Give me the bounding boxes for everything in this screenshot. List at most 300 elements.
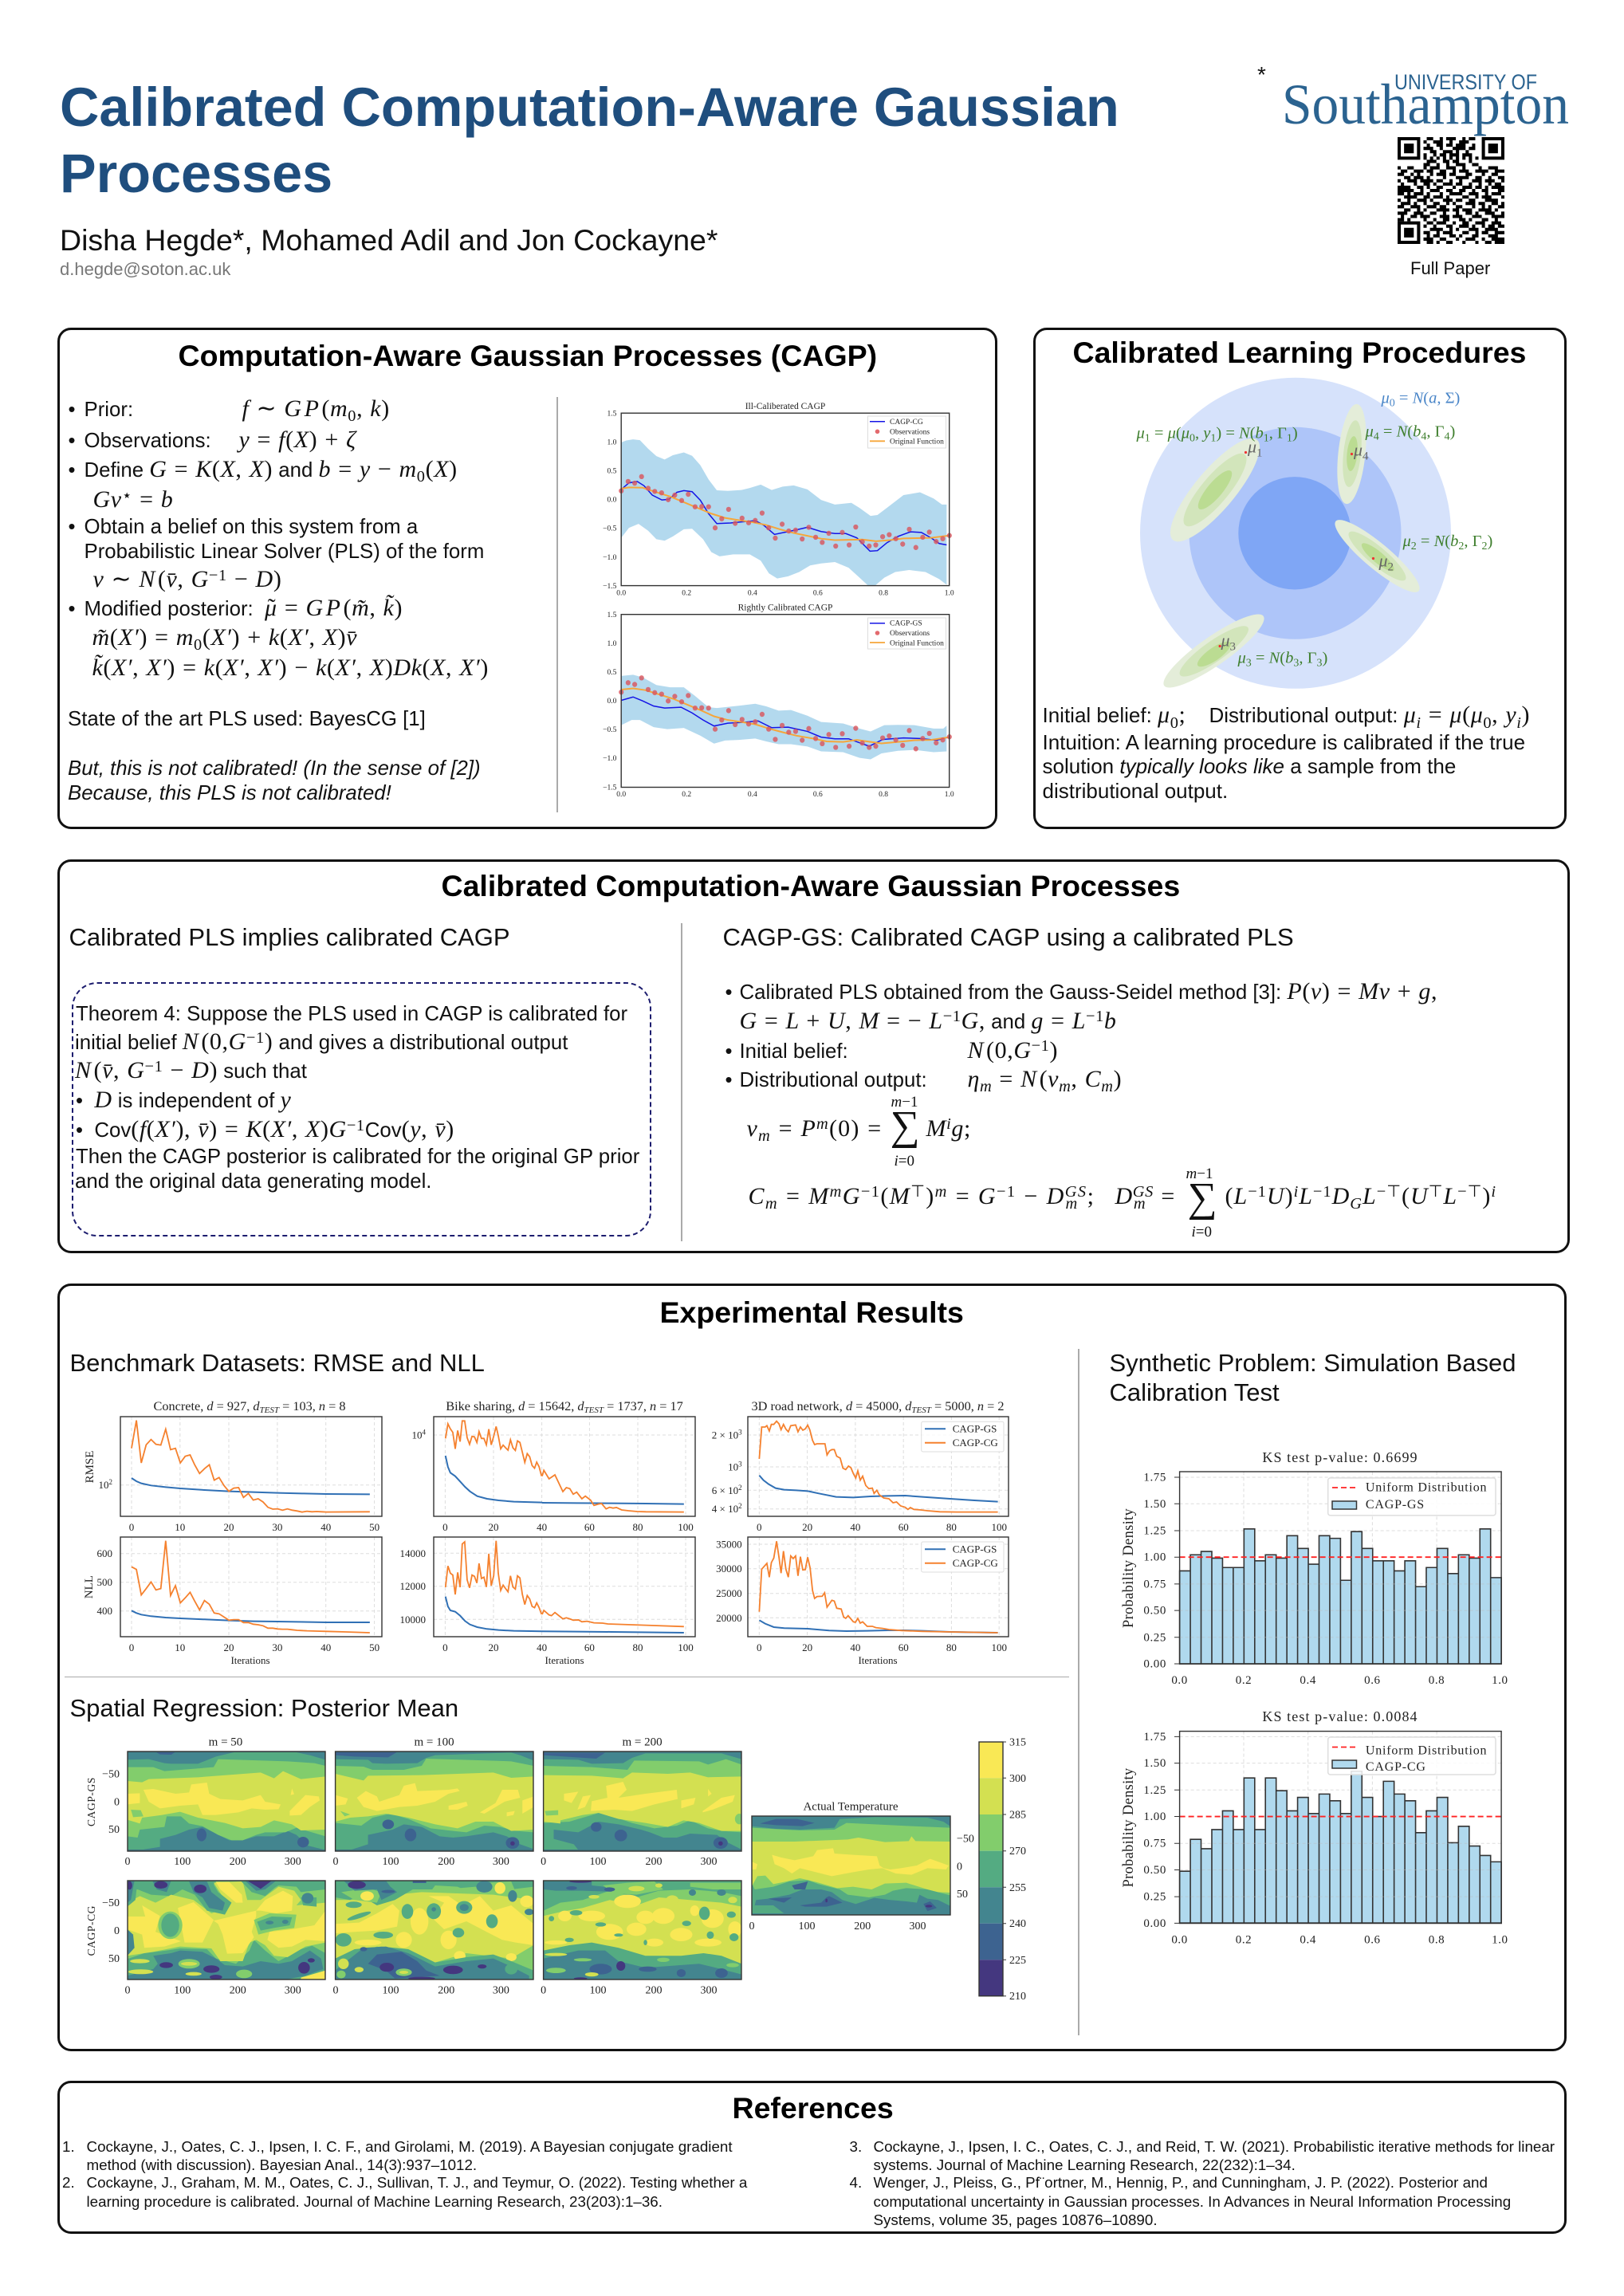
- diagram: prior and distributional outputs: 0: [1390, 397, 1395, 410]
- histogram: CAGP-CG: 0.6: [1364, 1933, 1380, 1946]
- plot: Concrete: 40: [320, 1521, 331, 1532]
- plot: Bike sharing: 10: [411, 1429, 422, 1441]
- plot: 3D road network: CAGP-CG: [952, 1556, 997, 1569]
- map: CAGP-CG m=50: −50: [102, 1897, 120, 1909]
- histogram: CAGP-CG: 1.0: [1492, 1933, 1508, 1946]
- histogram: CAGP-GS: 0.50: [1143, 1604, 1166, 1617]
- callout: Theorem 4: N(v̄, G−1 − D) such that: [75, 1057, 307, 1083]
- diagram: prior and distributional outputs: μ: [1248, 437, 1256, 456]
- map: CAGP-CG m=50: 50: [108, 1953, 120, 1964]
- map: CAGP-CG m=50: 200: [229, 1984, 246, 1996]
- text block: CAGP-GS derivation: G = L + U, M = − L−1G, and g = L−1b: [740, 1008, 1117, 1034]
- plot: Concrete: RMSE: [83, 1450, 96, 1483]
- diagram: prior and distributional outputs: 4: [1444, 431, 1449, 443]
- text block: initial belief and intuition: Distributional output: μi = μ(μ0, yi): [1209, 702, 1530, 732]
- plot: Concrete: 2: [108, 1478, 112, 1486]
- diagram: prior and distributional outputs: , Γ: [1464, 533, 1482, 550]
- diagram: prior and distributional outputs: =: [1417, 533, 1434, 550]
- plot: 3D road network: 20: [802, 1521, 812, 1532]
- plot: Concrete: NLL: [83, 1575, 96, 1598]
- author email: d.hegde@soton.ac.uk: [60, 259, 230, 279]
- diagram: prior and distributional outputs: μ: [1403, 533, 1411, 550]
- map: CAGP-GS m=100: 300: [492, 1856, 509, 1867]
- map: CAGP-GS m=200: [541, 1736, 744, 1867]
- histogram: CAGP-GS: 0.75: [1143, 1578, 1166, 1590]
- plot: rightly calibrated CAGP: −1.5: [603, 784, 616, 792]
- histogram: CAGP-CG: 0.8: [1428, 1933, 1445, 1946]
- plot: ill-calibrated CAGP: 0.4: [747, 589, 757, 597]
- plot: rightly calibrated CAGP: 0.0: [616, 791, 626, 799]
- plot: ill-calibrated CAGP: 0.0: [616, 589, 626, 597]
- diagram: prior and distributional outputs: 3: [1230, 641, 1236, 654]
- text block: CAGP-GS derivation: •: [725, 1040, 733, 1063]
- map: CAGP-CG m=100: 0: [332, 1984, 338, 1996]
- asterisk: *: [1257, 62, 1266, 87]
- plot: Concrete: = 103,: [279, 1398, 318, 1413]
- diagram: prior and distributional outputs: μ: [1137, 424, 1145, 442]
- panel: Experimental Results: [57, 1284, 1567, 2051]
- plot: rightly calibrated CAGP: 0.5: [607, 669, 616, 677]
- text block: CAGP-GS derivation: ∑: [1188, 1175, 1217, 1221]
- colorbar: 285: [1009, 1809, 1025, 1821]
- text block: CAGP definitions: •: [69, 516, 76, 538]
- text block: CAGP definitions: Probabilistic Linear Solver (PLS) of the form: [85, 541, 484, 563]
- callout: Theorem 4: [72, 982, 651, 1236]
- plot: 3D road network: n = 2: [977, 1398, 1004, 1413]
- diagram: prior and distributional outputs: ): [1449, 423, 1455, 440]
- map: actual temperature: 0: [749, 1920, 754, 1932]
- map: actual temperature: 100: [798, 1920, 815, 1932]
- reference list: left column: Cockayne, J., Graham, M. M., Oates, C. J., Sullivan, T. J., and Teymur, O. (2022). Testing whether a: [86, 2174, 747, 2191]
- reference list: left column: 1.: [62, 2138, 75, 2155]
- map: CAGP-GS m=50: m = 50: [208, 1736, 242, 1748]
- plot: 3D road network: 20: [802, 1641, 812, 1653]
- plot: Concrete: 10: [175, 1641, 185, 1653]
- map: CAGP-CG m=50: [85, 1880, 325, 1996]
- plot: Concrete: 30: [272, 1521, 282, 1532]
- colorbar: 255: [1009, 1881, 1025, 1893]
- map: CAGP-GS m=50: [85, 1736, 325, 1867]
- map: actual temperature: 200: [854, 1920, 871, 1932]
- map: CAGP-GS m=200: 200: [645, 1856, 662, 1867]
- subheading: left column: Calibrated PLS implies calibrated CAGP: [69, 923, 510, 951]
- plot: Bike sharing: 80: [632, 1641, 643, 1653]
- plot: 3D road network: Iterations: [858, 1653, 897, 1666]
- callout: Theorem 4: • Cov(f(X′), v̄) = K(X′, X)G−1Cov(y, v̄): [76, 1116, 454, 1142]
- subheading: synthetic problem: Synthetic Problem: Simulation Based: [1110, 1349, 1516, 1377]
- plot: 3D road network: 25000: [716, 1586, 741, 1599]
- colorbar: 210: [1009, 1991, 1025, 2003]
- text block: initial belief and intuition: [1043, 702, 1530, 803]
- plot: ill-calibrated CAGP: −1.5: [603, 582, 616, 590]
- plot: 3D road network: 6 × 10: [711, 1484, 738, 1496]
- diagram: prior and distributional outputs: 1: [1210, 432, 1216, 445]
- colorbar: 240: [1009, 1918, 1025, 1930]
- map: CAGP-GS m=50: 300: [284, 1856, 301, 1867]
- plot: 3D road network: 0: [757, 1521, 761, 1532]
- plot: rightly calibrated CAGP: 0.0: [607, 698, 616, 706]
- map: CAGP-CG m=200: 0: [541, 1984, 546, 1996]
- reference list: right column: Cockayne, J., Ipsen, I. C., Oates, C. J., and Reid, T. W. (2021). Probabilistic iterative methods for linear: [874, 2138, 1555, 2155]
- diagram: prior and distributional outputs: N(b: [1397, 423, 1421, 440]
- logo: University of Southampton: Southampton: [1282, 73, 1569, 136]
- plot: Concrete: 20: [223, 1641, 234, 1653]
- plot: 3D road network: CAGP-GS: [952, 1543, 997, 1555]
- panel: Computation-Aware Gaussian Processes: [57, 328, 997, 829]
- plot: rightly calibrated CAGP: 0.8: [879, 791, 888, 799]
- plot: ill-calibrated CAGP: Original Function: [890, 438, 944, 446]
- reference list: left column: method (with discussion). Bayesian Anal., 14(3):937–1012.: [86, 2156, 477, 2173]
- plot: rightly calibrated CAGP: [603, 603, 954, 799]
- histogram: CAGP-GS: 1.50: [1143, 1497, 1166, 1510]
- diagram: prior and distributional outputs: ): [1322, 649, 1327, 666]
- histogram: CAGP-CG: CAGP-CG: [1365, 1760, 1425, 1773]
- diagram: prior and distributional outputs: [1137, 378, 1492, 689]
- text block: CAGP-GS derivation: •: [725, 981, 733, 1004]
- reference list: left column: 2.: [62, 2174, 75, 2191]
- plot: Concrete: 600: [96, 1547, 112, 1559]
- diagram: prior and distributional outputs: , Γ: [1426, 423, 1445, 440]
- diagram: prior and distributional outputs: 3: [1246, 657, 1252, 670]
- plot: ill-calibrated CAGP: 0.5: [607, 467, 616, 475]
- plot: rightly calibrated CAGP: Observations: [890, 630, 930, 638]
- plot: 3D road network: = 5000,: [930, 1398, 977, 1413]
- histogram: CAGP-CG: KS test p-value: 0.0084: [1262, 1708, 1418, 1724]
- diagram: prior and distributional outputs: =: [1395, 389, 1413, 407]
- heading: Calibrated Computation-Aware Gaussian Processes: [442, 869, 1180, 902]
- map: CAGP-CG m=50: 0: [124, 1984, 130, 1996]
- text block: initial belief and intuition: Intuition: A learning procedure is calibrated if the true: [1043, 730, 1525, 754]
- plot: Bike sharing: 40: [537, 1521, 547, 1532]
- plot: Concrete: TEST: [259, 1405, 279, 1414]
- callout: Theorem 4: initial belief N(0,G−1) and gives a distributional output: [75, 1028, 568, 1055]
- text block: CAGP definitions: But, this is not calibrated! (In the sense of [2]): [68, 757, 481, 780]
- plot: Bike sharing: 60: [584, 1641, 594, 1653]
- plot: Concrete: Concrete, d = 927, d: [153, 1398, 259, 1413]
- text block: CAGP definitions: Modified posterior: μ = GP(m̃, k̃): [85, 595, 403, 621]
- plot: Bike sharing: 20: [488, 1641, 498, 1653]
- text block: CAGP-GS derivation: Initial belief:: [740, 1040, 848, 1063]
- diagram: prior and distributional outputs: 0: [1189, 432, 1195, 445]
- histogram: CAGP-CG: 0.4: [1300, 1933, 1315, 1946]
- plot: ill-calibrated CAGP: 0.8: [879, 589, 888, 597]
- plot: Bike sharing: 0: [442, 1521, 447, 1532]
- reference list: right column: [850, 2138, 1555, 2228]
- text block: CAGP-GS derivation: •: [725, 1069, 733, 1091]
- reference list: right column: systems. Journal of Machine Learning Research, 22(232):1–34.: [874, 2156, 1296, 2173]
- text block: initial belief and intuition: Initial belief: μ0;: [1043, 702, 1186, 732]
- plot: 3D road network: 0: [757, 1641, 761, 1653]
- plot: Bike sharing: 20: [488, 1521, 498, 1532]
- plot: rightly calibrated CAGP: Original Function: [890, 639, 944, 647]
- subheading: benchmark datasets: Benchmark Datasets: RMSE and NLL: [70, 1349, 485, 1377]
- text block: CAGP-GS derivation: [725, 978, 1496, 1240]
- map: CAGP-GS m=50: −50: [102, 1768, 120, 1780]
- plot: Bike sharing: TEST: [584, 1405, 604, 1414]
- plot: Concrete: 400: [96, 1604, 112, 1617]
- map: CAGP-GS m=100: m = 100: [414, 1736, 454, 1748]
- text block: CAGP-GS derivation: vm = Pm(0) =: [746, 1115, 882, 1145]
- plot: Bike sharing: 80: [632, 1521, 643, 1532]
- histogram: CAGP-CG: 0.25: [1143, 1890, 1166, 1903]
- map: CAGP-CG m=100: 300: [492, 1984, 509, 1996]
- text block: CAGP definitions: •: [69, 399, 76, 421]
- map: CAGP-GS m=100: 100: [382, 1856, 399, 1867]
- text block: CAGP definitions: m̃(X′) = m0(X′) + k(X′, X)v̄: [92, 624, 357, 654]
- plot: rightly calibrated CAGP: 1.0: [607, 639, 616, 647]
- plot: ill-calibrated CAGP: −1.0: [603, 553, 616, 561]
- reference list: right column: Systems, volume 35, pages 10876–10890.: [874, 2211, 1158, 2228]
- callout: Theorem 4: Then the CAGP posterior is calibrated for the original GP prior: [76, 1146, 639, 1168]
- map: CAGP-CG m=50: 300: [284, 1984, 301, 1996]
- plot: rightly calibrated CAGP: −0.5: [603, 726, 616, 734]
- colorbar: 225: [1009, 1954, 1025, 1966]
- diagram: prior and distributional outputs: , Γ: [1269, 424, 1287, 442]
- text block: CAGP definitions: Define G = K(X, X) and b = y − m0(X): [85, 456, 458, 486]
- plot: rightly calibrated CAGP: 1.0: [944, 791, 954, 799]
- plot: 3D road network: 60: [898, 1641, 908, 1653]
- authors: Disha Hegde*, Mohamed Adil and Jon Cockayne*: [60, 223, 718, 257]
- reference list: right column: 3.: [850, 2138, 862, 2155]
- text block: CAGP-GS derivation: Cm = MmG−1(M⊤)m = G−1 − DGSm ;: [748, 1183, 1095, 1213]
- reference list: left column: Cockayne, J., Oates, C. J., Ipsen, I. C. F., and Girolami, M. (2019). A Bayesian conjugate gradient: [86, 2138, 733, 2155]
- QR caption: Full Paper: [1410, 258, 1490, 278]
- histogram: CAGP-CG: 1.00: [1143, 1810, 1166, 1822]
- plot: Concrete: 0: [128, 1521, 134, 1532]
- text block: CAGP-GS derivation: Mig;: [926, 1115, 971, 1142]
- diagram: prior and distributional outputs: N(b: [1434, 533, 1458, 550]
- histogram: CAGP-GS: CAGP-GS: [1365, 1497, 1424, 1511]
- plot: Bike sharing: 0: [442, 1641, 447, 1653]
- histogram: CAGP-GS: [1121, 1449, 1508, 1687]
- colorbar: [979, 1736, 1025, 2003]
- colorbar: 270: [1009, 1846, 1025, 1858]
- map: CAGP-CG m=50: 100: [174, 1984, 191, 1996]
- QR code: [1398, 137, 1504, 244]
- plot: rightly calibrated CAGP: CAGP-GS: [890, 619, 922, 627]
- panel: References: [57, 2081, 1567, 2234]
- plot: Concrete: 10: [98, 1478, 108, 1491]
- plot: Bike sharing: 14000: [399, 1547, 426, 1559]
- plot: Concrete: 40: [320, 1641, 331, 1653]
- histogram: CAGP-CG: [1121, 1708, 1508, 1946]
- text block: CAGP definitions: •: [69, 430, 76, 452]
- colorbar: 315: [1009, 1736, 1025, 1748]
- text block: CAGP definitions: State of the art PLS used: BayesCG [1]: [68, 708, 426, 730]
- plot: 3D road network: CAGP-GS: [952, 1422, 997, 1434]
- plot: 3D road network: 100: [991, 1641, 1006, 1653]
- histogram: CAGP-GS: 0.25: [1143, 1631, 1166, 1644]
- plot: Bike sharing: = 1737,: [604, 1398, 650, 1413]
- text block: initial belief and intuition: solution typically looks like a sample from the: [1043, 754, 1456, 778]
- plot: Bike sharing: 12000: [399, 1580, 426, 1591]
- histogram: CAGP-CG: 0.0: [1171, 1933, 1187, 1946]
- diagram: prior and distributional outputs: μ: [1221, 630, 1230, 651]
- map: CAGP-CG m=100: 100: [382, 1984, 399, 1996]
- map: actual temperature: 50: [957, 1888, 968, 1901]
- diagram: prior and distributional outputs: =: [1252, 649, 1269, 666]
- histogram: CAGP-CG: 0.2: [1235, 1933, 1252, 1946]
- plot: rightly calibrated CAGP: Rightly Calibrated CAGP: [737, 603, 832, 612]
- subheading: right column: CAGP-GS: Calibrated CAGP using a calibrated PLS: [722, 923, 1294, 951]
- text block: CAGP-GS derivation: ηm = N(vm, Cm): [968, 1066, 1122, 1095]
- plot: ill-calibrated CAGP: Ill-Caliberated CAGP: [745, 402, 825, 411]
- text block: CAGP definitions: f ∼ GP(m0, k): [242, 395, 390, 425]
- text block: CAGP definitions: Gv⋆ = b: [92, 486, 173, 513]
- histogram: CAGP-CG: 0.50: [1143, 1864, 1166, 1877]
- histogram: CAGP-GS: 1.0: [1492, 1674, 1508, 1687]
- plot: Bike sharing: [399, 1398, 695, 1666]
- histogram: CAGP-CG: 1.50: [1143, 1757, 1166, 1770]
- plot: Concrete: 20: [223, 1521, 234, 1532]
- diagram: prior and distributional outputs: ) =: [1216, 424, 1239, 442]
- heading: Experimental Results: [660, 1295, 964, 1329]
- map: actual temperature: −50: [957, 1833, 973, 1845]
- plot: Bike sharing: 10000: [399, 1614, 426, 1625]
- plot: Concrete: n = 8: [318, 1398, 345, 1413]
- map: CAGP-GS m=200: 100: [589, 1856, 606, 1867]
- plot: Bike sharing: 100: [678, 1641, 693, 1653]
- panel: Calibrated Learning Procedures: [1033, 328, 1567, 829]
- colorbar: 300: [1009, 1772, 1025, 1784]
- map: CAGP-CG m=200: 100: [589, 1984, 606, 1996]
- heading: References: [732, 2091, 894, 2125]
- text block: CAGP definitions: •: [69, 459, 76, 482]
- plot: ill-calibrated CAGP: 1.0: [944, 589, 954, 597]
- diagram: prior and distributional outputs: μ: [1354, 440, 1363, 459]
- plot: Concrete: 500: [96, 1575, 112, 1588]
- plot: Concrete: [83, 1398, 381, 1666]
- text block: CAGP definitions: •: [69, 598, 76, 620]
- chart: spatial regression contour maps: [85, 1736, 1025, 2003]
- plot: 3D road network: 3D road network, d = 45000, d: [751, 1398, 911, 1413]
- plot: ill-calibrated CAGP: CAGP-CG: [890, 418, 922, 426]
- histogram: CAGP-CG: 1.75: [1143, 1730, 1166, 1743]
- plot: rightly calibrated CAGP: 0.4: [747, 791, 757, 799]
- reference list: right column: 4.: [850, 2174, 862, 2191]
- text block: CAGP-GS derivation: i=0: [1191, 1224, 1212, 1240]
- text block: CAGP definitions: Because, this PLS is not calibrated!: [68, 782, 391, 804]
- plot: 3D road network: 2 × 10: [711, 1429, 738, 1441]
- map: CAGP-GS m=100: [332, 1736, 533, 1867]
- text block: CAGP-GS derivation: m−1: [891, 1094, 918, 1111]
- diagram: prior and distributional outputs: y: [1203, 424, 1210, 442]
- diagram: prior and distributional outputs: μ(μ: [1168, 424, 1189, 442]
- plot: ill-calibrated CAGP: −0.5: [603, 525, 616, 533]
- map: CAGP-GS m=200: m = 200: [622, 1736, 662, 1748]
- plot: 3D road network: 100: [991, 1521, 1006, 1532]
- text block: CAGP definitions: v ∼ N(v̄, G−1 − D): [92, 566, 281, 592]
- plot: 3D road network: TEST: [911, 1405, 931, 1414]
- plot: 3D road network: 30000: [716, 1563, 741, 1574]
- plot: ill-calibrated CAGP: 1.0: [607, 438, 616, 446]
- plot: ill-calibrated CAGP: 0.0: [607, 496, 616, 504]
- diagram: prior and distributional outputs: N(a, Σ): [1413, 389, 1460, 407]
- plot: Bike sharing: Bike sharing, d = 15642, d: [446, 1398, 584, 1413]
- map: CAGP-CG m=100: 200: [438, 1984, 454, 1996]
- heading: Computation-Aware Gaussian Processes (CAGP): [179, 339, 877, 372]
- histogram: CAGP-GS: 1.75: [1143, 1471, 1166, 1484]
- plot: Bike sharing: n = 17: [650, 1398, 682, 1413]
- plot: Bike sharing: 100: [678, 1521, 693, 1532]
- plot: 3D road network: 10: [728, 1461, 738, 1472]
- text block: CAGP-GS derivation: ∑: [890, 1103, 920, 1149]
- plot: Bike sharing: 40: [537, 1641, 547, 1653]
- diagram: prior and distributional outputs: 4: [1363, 450, 1369, 462]
- map: CAGP-GS m=50: 200: [229, 1856, 246, 1867]
- callout: Theorem 4: and the original data generating model.: [75, 1170, 431, 1193]
- histogram: CAGP-CG: Probability Density: [1121, 1767, 1137, 1887]
- diagram: prior and distributional outputs: 1: [1287, 432, 1292, 445]
- text block: CAGP-GS derivation: N(0,G−1): [968, 1037, 1058, 1063]
- map: CAGP-CG m=200: 200: [645, 1984, 662, 1996]
- plot: Concrete: 50: [369, 1521, 379, 1532]
- plot: ill-calibrated CAGP: [603, 402, 954, 597]
- histogram: CAGP-CG: 0.75: [1143, 1837, 1166, 1850]
- logo: University of Southampton: UNIVERSITY OF: [1394, 70, 1537, 94]
- map: actual temperature: 300: [909, 1920, 926, 1932]
- plot: rightly calibrated CAGP: −1.0: [603, 755, 616, 763]
- diagram: prior and distributional outputs: 2: [1411, 541, 1417, 552]
- diagram: prior and distributional outputs: 4: [1374, 431, 1379, 443]
- plot: ill-calibrated CAGP: 1.5: [607, 410, 616, 418]
- histogram: CAGP-GS: 0.4: [1300, 1674, 1315, 1687]
- diagram: prior and distributional outputs: 4: [1421, 431, 1426, 443]
- reference list: left column: learning procedure is calibrated. Journal of Machine Learning Research, 23(203):1–36.: [86, 2193, 663, 2210]
- map: CAGP-CG m=50: CAGP-CG: [85, 1905, 97, 1956]
- heading: Calibrated Learning Procedures: [1073, 336, 1526, 369]
- plot: 3D road network: 35000: [716, 1538, 741, 1550]
- plot: 3D road network: 2: [738, 1483, 741, 1491]
- plot: 3D road network: 60: [898, 1521, 908, 1532]
- map: CAGP-GS m=200: 0: [541, 1856, 546, 1867]
- map: CAGP-CG m=200: 300: [700, 1984, 717, 1996]
- diagram: prior and distributional outputs: 2: [1458, 541, 1464, 552]
- map: CAGP-GS m=50: 0: [113, 1796, 120, 1808]
- map: CAGP-GS m=200: 300: [700, 1856, 717, 1867]
- diagram: prior and distributional outputs: =: [1379, 423, 1397, 440]
- plot: 3D road network: 2: [738, 1502, 741, 1510]
- histogram: CAGP-GS: 0.6: [1364, 1674, 1380, 1687]
- plot: Concrete: Iterations: [230, 1653, 269, 1666]
- plot: 3D road network: 40: [850, 1521, 860, 1532]
- diagram: prior and distributional outputs: μ: [1381, 389, 1390, 407]
- histogram: CAGP-GS: 0.8: [1428, 1674, 1445, 1687]
- plot: Concrete: 50: [369, 1641, 379, 1653]
- diagram: prior and distributional outputs: 3: [1293, 657, 1299, 670]
- plot: ill-calibrated CAGP: 0.6: [812, 589, 822, 597]
- plot: 3D road network: 80: [946, 1641, 956, 1653]
- diagram: prior and distributional outputs: μ: [1365, 423, 1374, 440]
- text block: CAGP definitions: k̃(X′, X′) = k(X′, X′) − k(X′, X)Dk(X, X′): [92, 655, 489, 681]
- histogram: CAGP-GS: KS test p-value: 0.6699: [1262, 1449, 1418, 1465]
- plot: 3D road network: 3: [738, 1460, 742, 1468]
- plot: Concrete: 0: [128, 1641, 134, 1653]
- plot: Bike sharing: 4: [422, 1428, 426, 1436]
- diagram: prior and distributional outputs: 2: [1481, 541, 1487, 552]
- text block: CAGP definitions: y = f(X) + ζ: [239, 427, 356, 453]
- map: CAGP-GS m=50: 0: [124, 1856, 130, 1867]
- histogram: CAGP-GS: 0.0: [1171, 1674, 1187, 1687]
- plot: 3D road network: 80: [946, 1521, 956, 1532]
- map: CAGP-GS m=100: 0: [332, 1856, 338, 1867]
- histogram: CAGP-GS: 0.2: [1235, 1674, 1252, 1687]
- plot: 3D road network: [711, 1398, 1008, 1666]
- histogram: CAGP-CG: 0.00: [1143, 1917, 1166, 1929]
- diagram: prior and distributional outputs: N(b: [1269, 649, 1293, 666]
- histogram: CAGP-CG: Uniform Distribution: [1365, 1744, 1487, 1757]
- text block: CAGP-GS derivation: DGSm =: [1115, 1183, 1175, 1213]
